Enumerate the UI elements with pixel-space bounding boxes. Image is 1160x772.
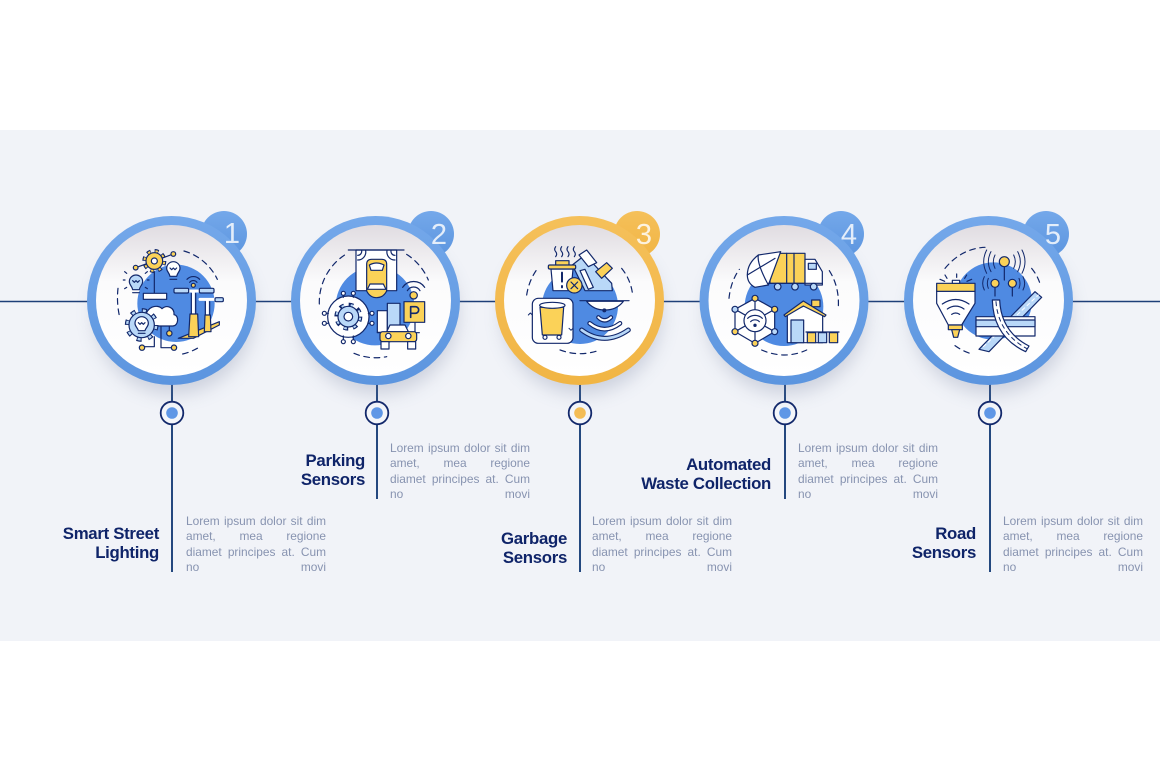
step 1 circle [87,211,256,394]
heading: Road Sensors: Sensors [912,543,976,562]
text block 2: amet, mea regione [390,456,530,470]
text block 4 [798,441,938,501]
step 3 circle: 3 [636,219,652,251]
heading: Parking Sensors: Sensors [301,470,365,489]
panel background [0,130,1160,641]
connectors and markers [161,380,1001,572]
text block 4: amet, mea regione [798,456,938,470]
icon: automated waste collection [729,252,839,355]
step 3 circle [495,211,664,394]
text block 4: no movi [798,487,938,501]
text block 3: amet, mea regione [592,529,732,543]
heading: Road Sensors [912,524,976,562]
text block 1: Lorem ipsum dolor sit dim [186,514,326,528]
horizontal timeline line [0,300,1160,302]
text block 5 [1003,514,1143,574]
text block 1: diamet principes at. Cum [186,545,326,559]
text block 2 [390,441,530,501]
text block 4: diamet principes at. Cum [798,472,938,486]
step 4 circle [700,211,868,394]
step 5 circle [904,211,1073,394]
text block 3: Lorem ipsum dolor sit dim [592,514,732,528]
text block 3: no movi [592,560,732,574]
text block 5: Lorem ipsum dolor sit dim [1003,514,1143,528]
text block 5: no movi [1003,560,1143,574]
step 1 circle: 1 [224,218,240,250]
text block 4: Lorem ipsum dolor sit dim [798,441,938,455]
icon: smart street lighting [117,251,223,354]
text block 2: Lorem ipsum dolor sit dim [390,441,530,455]
icon: road sensors [937,247,1042,354]
text block 2: no movi [390,487,530,501]
icon: parking sensors [319,250,428,358]
step 2 circle: 2 [431,219,447,251]
heading: Road Sensors: Road [935,524,976,543]
heading: Automated Waste Collection: Waste Collection [641,474,771,493]
text block 1: amet, mea regione [186,529,326,543]
heading: Garbage Sensors: Garbage [501,529,567,548]
heading: Smart Street Lighting: Lighting [95,543,159,562]
heading: Smart Street Lighting: Smart Street [63,524,159,543]
heading: Parking Sensors: Parking [306,451,365,470]
step 5 circle: 5 [1045,219,1061,251]
step 4 circle: 4 [841,219,857,251]
step 2 circle [291,211,460,394]
heading: Smart Street Lighting [63,524,160,562]
text block 1 [186,514,326,574]
text block 5: diamet principes at. Cum [1003,545,1143,559]
heading: Garbage Sensors: Sensors [503,548,567,567]
icon: garbage sensors [527,247,633,354]
text block 1: no movi [186,560,326,574]
heading: Automated Waste Collection: Automated [686,455,771,474]
heading: Parking Sensors [301,451,365,489]
heading: Automated Waste Collection [641,455,771,493]
text block 3 [592,514,732,574]
text block 3: diamet principes at. Cum [592,545,732,559]
text block 5: amet, mea regione [1003,529,1143,543]
heading: Garbage Sensors [501,529,567,567]
text block 2: diamet principes at. Cum [390,472,530,486]
